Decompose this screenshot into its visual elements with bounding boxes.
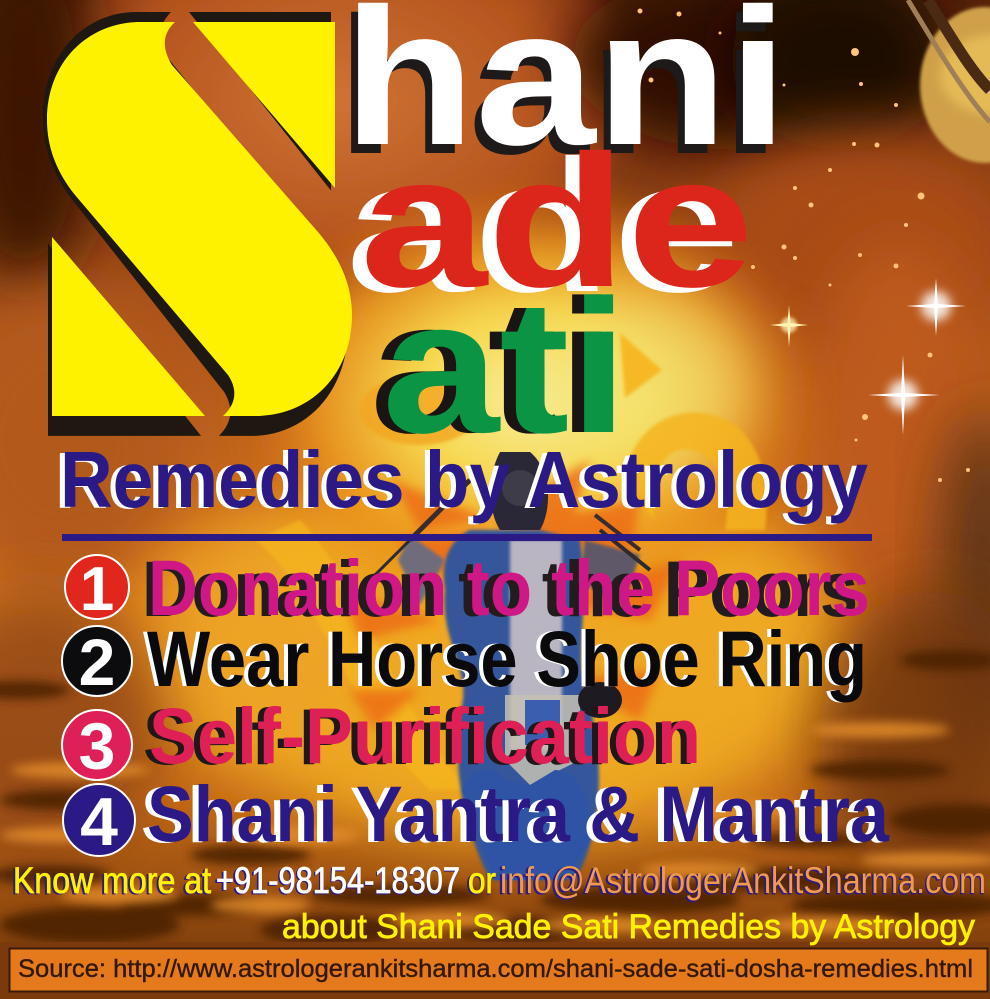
S fill <box>47 22 352 416</box>
remedy 2 <box>62 614 867 703</box>
label 4: Shani Yantra & Mantra <box>147 769 890 858</box>
icon: saturn planet <box>908 0 990 163</box>
label 3: Self-Purification <box>149 691 701 780</box>
title word: ade: ade <box>360 116 754 326</box>
title word: ati: ati <box>382 261 628 473</box>
icon: sparkle star lower <box>868 355 940 435</box>
badge 1 <box>65 555 129 624</box>
badge 4 <box>63 784 135 860</box>
subtitle: Remedies by Astrology: Remedies by Astrology <box>60 435 868 524</box>
remedy 3 <box>62 691 701 783</box>
contact line: +91-98154-18307 <box>214 861 460 902</box>
big letter S <box>43 12 352 436</box>
contact line: Know more at <box>13 860 212 901</box>
om symbol halo <box>255 333 767 790</box>
title word: ati: ati <box>370 261 616 473</box>
badge 2: 2 <box>79 625 115 699</box>
contact line: Know more at <box>11 861 210 902</box>
contact line: or <box>466 861 496 902</box>
contact line: or <box>468 860 496 901</box>
label 1: Donation to the Poors <box>148 543 870 632</box>
source bar: Source: http://www.astrologerankitsharma.com/shani-sade-sati-dosha-remedies.html <box>18 955 973 983</box>
title word: ade: ade <box>346 121 740 331</box>
icon: faint sparkle star <box>770 305 808 347</box>
badge 2 <box>62 625 132 699</box>
illustration: Shani deity figure <box>360 452 650 880</box>
contact line: +91-98154-18307 <box>216 860 460 901</box>
bottom clouds <box>0 650 990 999</box>
contact line <box>11 860 986 902</box>
remedy 1 <box>65 543 870 633</box>
S shadow <box>43 12 348 436</box>
about line: about Shani Sade Sati Remedies by Astrology <box>282 908 975 946</box>
stars field <box>638 8 970 482</box>
badge 3: 3 <box>79 709 115 783</box>
source bar <box>10 948 988 992</box>
remedy 4 <box>63 769 890 860</box>
divider line <box>62 534 872 541</box>
badge 1: 1 <box>80 555 114 624</box>
label 3: Self-Purification <box>143 692 695 781</box>
label 1: Donation to the Poors <box>142 544 858 633</box>
badge 3 <box>62 709 132 783</box>
label 2: Wear Horse Shoe Ring <box>143 614 863 703</box>
icon: large sparkle star <box>906 278 966 336</box>
radiating orange halo behind figure <box>340 460 680 730</box>
subtitle: Remedies by Astrology: Remedies by Astrology <box>55 436 863 525</box>
label 2: Wear Horse Shoe Ring <box>147 614 867 703</box>
label 4: Shani Yantra & Mantra <box>141 770 884 859</box>
badge 4: 4 <box>80 784 118 860</box>
